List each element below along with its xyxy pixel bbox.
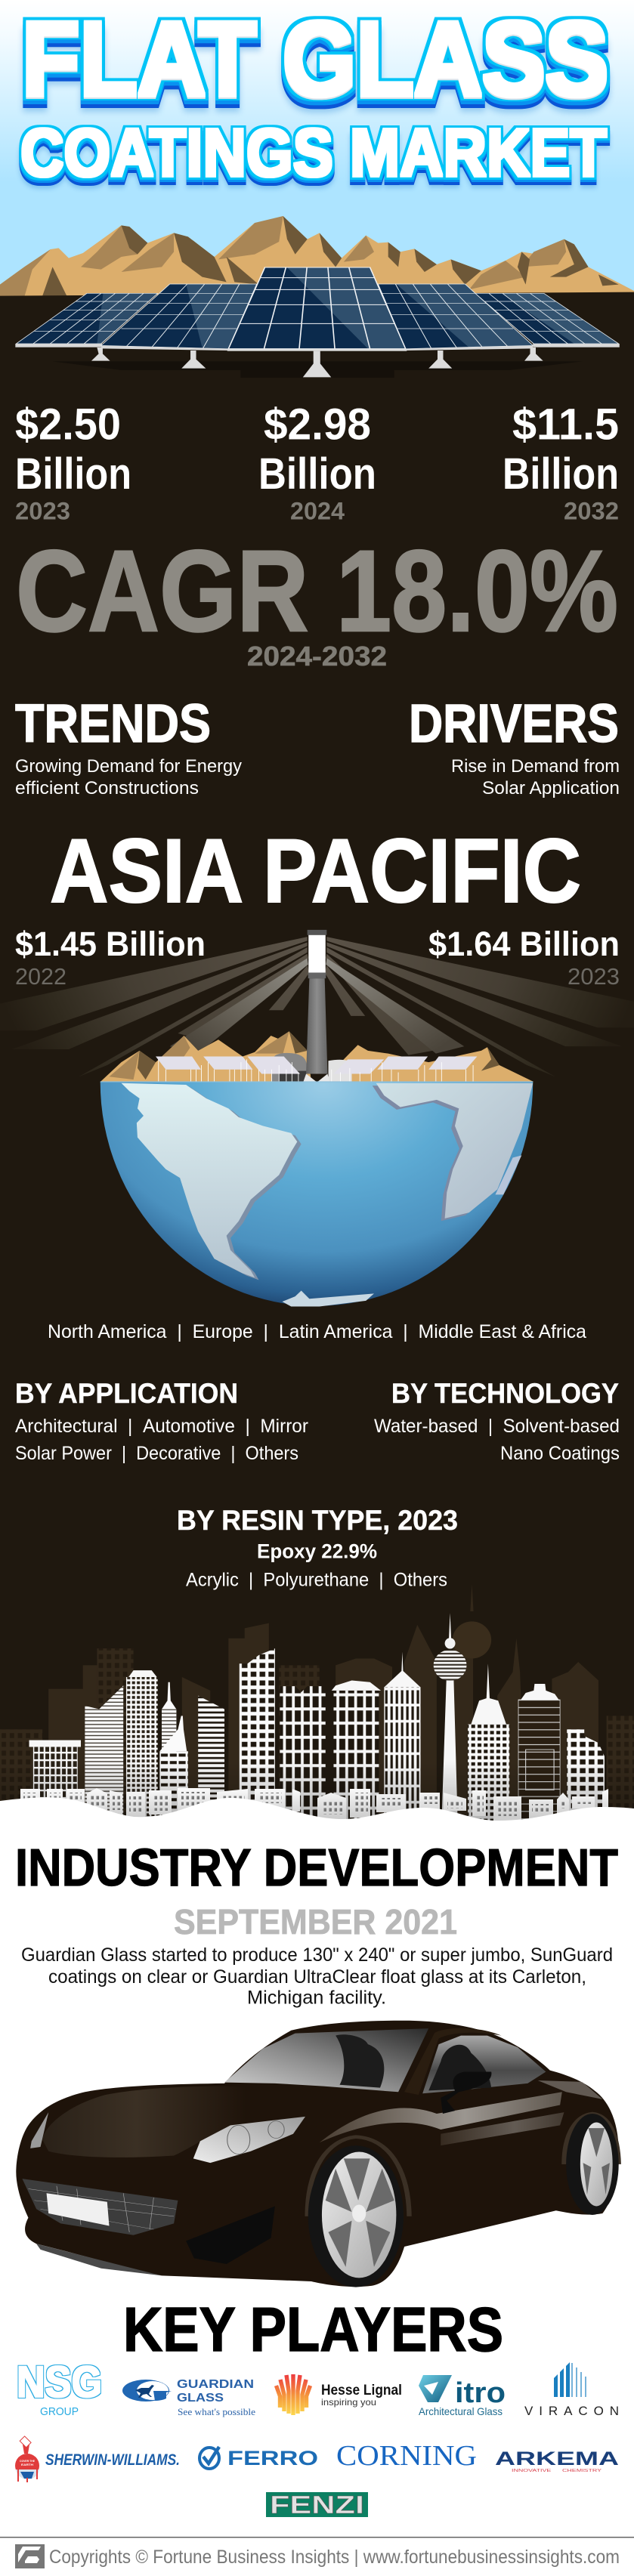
building: slanted right — [198, 1696, 224, 1830]
stat: 2024 market size: 2024 — [290, 497, 345, 524]
low houses — [20, 1788, 608, 1821]
stat: 2023 market size: Billion — [15, 449, 131, 499]
solar tower — [303, 930, 329, 1082]
building: low left — [29, 1740, 81, 1830]
white ground wave — [0, 1797, 634, 1832]
globe mountains — [101, 1031, 533, 1082]
heading: key players: KEY PLAYERS — [123, 2294, 503, 2364]
illustration: black sports car — [16, 2021, 619, 2287]
ground — [0, 292, 634, 378]
head rest — [428, 2045, 491, 2090]
ground shadows — [53, 361, 583, 378]
globe top line — [101, 1081, 533, 1083]
segment: by resin type: Epoxy 22.9% — [257, 1540, 377, 1562]
building: outlined grid — [518, 1684, 560, 1830]
skyline buildings — [0, 1584, 634, 1830]
drivers — [409, 694, 620, 798]
trends: efficient Constructions — [15, 778, 199, 798]
segment: by technology: BY TECHNOLOGY — [391, 1378, 619, 1409]
logo: Arkema — [495, 2448, 619, 2473]
logo: Ferro — [199, 2447, 318, 2469]
stat: 2032 market size: Billion — [503, 449, 619, 499]
stat: 2024 market size: Billion — [258, 449, 376, 499]
front wheel — [308, 2145, 404, 2287]
date: SEPTEMBER 2021 — [174, 1902, 457, 1941]
stat: 2032 market size — [503, 400, 619, 524]
car body — [16, 2021, 619, 2287]
building: twin roof — [280, 1686, 326, 1830]
solar panel: right — [378, 284, 533, 351]
stat: 2024 market size — [258, 400, 376, 524]
mountains — [0, 216, 634, 297]
segment: by application: BY APPLICATION — [15, 1378, 238, 1409]
trends: TRENDS — [15, 694, 211, 754]
solar panel: centre — [227, 267, 407, 351]
building: slanted stripes — [85, 1685, 123, 1830]
logo: Vitro: itro — [455, 2377, 506, 2409]
mini solar panels — [156, 1057, 477, 1082]
Antarctica — [282, 1290, 374, 1307]
logo: Sherwin-Williams: COVER THE — [20, 2459, 35, 2463]
regions list: North America | Europe | Latin America | Middle East & Africa — [48, 1321, 586, 1342]
logo: Guardian Glass: GLASS — [177, 2392, 224, 2405]
base fade on buildings — [0, 1760, 634, 1821]
logo: Hesse Lignal — [277, 2374, 402, 2415]
continent: South America — [122, 1083, 302, 1280]
rear wheel — [566, 2114, 619, 2215]
front splitter — [36, 2244, 162, 2275]
logo: Vitro: Architectural Glass — [419, 2405, 503, 2417]
drivers: Solar Application — [482, 778, 620, 798]
trends — [15, 694, 242, 798]
logo: Vitro — [419, 2375, 506, 2417]
stat: 2032 market size: $11.5 — [512, 400, 619, 449]
TV tower — [434, 1613, 467, 1824]
side headlight — [30, 2112, 48, 2148]
logo: Ferro: FERRO — [227, 2447, 318, 2469]
background: dark panel — [0, 296, 634, 1830]
logo: NSG: NSG — [17, 2358, 102, 2407]
panel stands — [91, 347, 543, 377]
illustration: globe with tower — [0, 930, 634, 1307]
logo: Sherwin-Williams: SHERWIN-WILLIAMS. — [45, 2451, 180, 2469]
globe hemisphere — [101, 1082, 533, 1306]
light rays — [0, 937, 634, 1076]
trends: Growing Demand for Energy — [15, 756, 242, 777]
title — [20, 0, 608, 191]
building: grid tower — [126, 1670, 158, 1830]
logo: Arkema: ARKEMA — [495, 2448, 619, 2469]
stat: 2022 region size: 2022 — [15, 963, 66, 990]
logo: Hesse Lignal: inspiring you — [321, 2397, 376, 2408]
continent: Africa edge — [373, 1083, 533, 1221]
grille — [22, 2179, 178, 2235]
guardian emblem — [122, 2380, 172, 2401]
logo: Arkema: INNOVATIVE CHEMISTRY — [512, 2469, 602, 2473]
stat: 2023 market size: 2023 — [15, 497, 70, 524]
side window — [422, 2036, 546, 2093]
stat: 2022 region size: $1.45 Billion — [15, 925, 206, 963]
roof bar — [404, 2028, 502, 2095]
stat: 2023 market size — [15, 400, 131, 524]
logo: Corning: CORNING — [336, 2440, 477, 2472]
logo: Sherwin-Williams: EARTH — [21, 2463, 33, 2466]
development description — [21, 1944, 613, 2008]
footer logo — [15, 2544, 45, 2568]
development description: coatings on clear or Guardian UltraClear float glass at its Carleton, — [48, 1966, 586, 1988]
building: spire grid — [468, 1663, 509, 1830]
stat: 2032 market size: 2032 — [564, 497, 619, 524]
segment: by application: Architectural | Automotive | Mirror — [15, 1416, 308, 1437]
logo: Sherwin-Williams — [15, 2436, 180, 2482]
region heading: ASIA PACIFIC — [50, 820, 581, 922]
body highlights — [320, 2092, 562, 2142]
background: sky — [0, 0, 634, 302]
logo: Guardian Glass: See what's possible — [178, 2407, 255, 2417]
segment: by technology: Water-based | Solvent-based — [374, 1416, 620, 1437]
segment: by application: Solar Power | Decorative | Others — [15, 1443, 298, 1464]
seat silhouette — [336, 2034, 384, 2088]
logo: Fenzi: FENZI — [270, 2491, 364, 2519]
development description: Guardian Glass started to produce 130" x 240" or super jumbo, SunGuard — [21, 1944, 613, 1966]
footer rule — [0, 2537, 634, 2538]
building: stepped right — [567, 1729, 605, 1830]
logo: Guardian Glass — [122, 2378, 255, 2417]
background buildings — [0, 1584, 634, 1830]
segment: by resin type: BY RESIN TYPE, 2023 — [177, 1505, 458, 1536]
drivers: Rise in Demand from — [451, 756, 620, 777]
building: antenna tower — [159, 1682, 188, 1830]
segment: by technology: Nano Coatings — [500, 1443, 620, 1464]
logo: Hesse Lignal: Hesse Lignal — [321, 2383, 402, 2398]
domes near tower — [272, 1053, 307, 1082]
stat: 2024 market size: $2.98 — [264, 400, 371, 449]
segment: by application — [15, 1378, 308, 1464]
background: white lower section — [0, 1828, 634, 2576]
stat: 2022 region size — [15, 925, 206, 990]
lower vent — [186, 2206, 275, 2264]
stat: 2023 region size — [428, 925, 620, 990]
development description: Michigan facility. — [247, 1987, 386, 2008]
CAGR: 2024-2032 — [247, 641, 387, 672]
logo: Viracon: VIRACON — [524, 2404, 619, 2418]
segment: by resin type — [177, 1505, 458, 1591]
illustration: city skyline — [0, 1584, 634, 1832]
headlight — [193, 2117, 305, 2163]
windshield — [224, 2028, 428, 2092]
wheel arches — [308, 2114, 619, 2216]
solar panel: far left — [15, 293, 158, 347]
stat: 2023 market size: $2.50 — [15, 400, 121, 449]
building: spire — [384, 1652, 421, 1830]
logo: Viracon — [524, 2362, 619, 2418]
segment: by technology — [374, 1378, 620, 1464]
mirror — [441, 2072, 491, 2114]
stat: 2023 region size: 2023 — [568, 963, 620, 990]
stat: 2023 region size: $1.64 Billion — [428, 925, 620, 963]
building: stepped — [240, 1648, 275, 1830]
solar panel: far right — [475, 293, 620, 347]
solar panel: left — [101, 284, 257, 351]
illustration: mountains and solar panels — [0, 216, 634, 378]
hood — [42, 2086, 356, 2157]
segment: by resin type: Acrylic | Polyurethane | Others — [186, 1570, 447, 1591]
logo: NSG: GROUP — [40, 2405, 79, 2418]
building: wide — [332, 1681, 381, 1830]
footer — [15, 2544, 620, 2568]
logo: Guardian Glass: GUARDIAN — [177, 2378, 254, 2391]
